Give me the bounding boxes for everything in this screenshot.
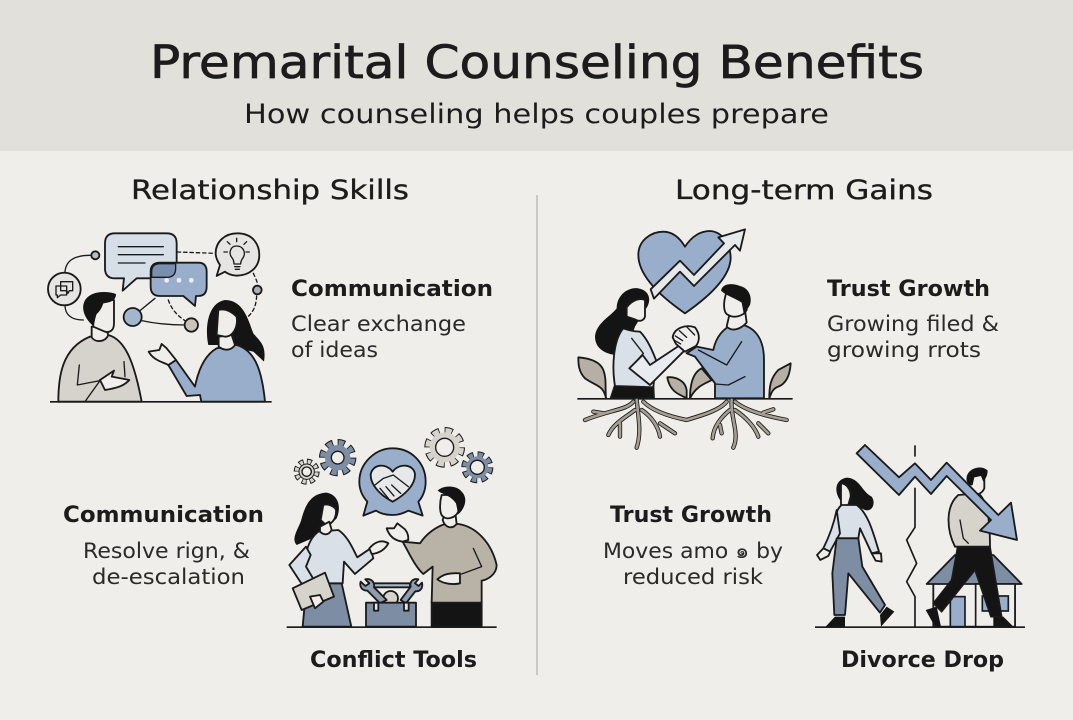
subtitle: How counseling helps couples prepare <box>244 99 829 130</box>
text: trust growth top <box>827 277 999 362</box>
text: communication: Clear exchange <box>291 312 466 336</box>
text: trust growth lower <box>603 503 783 589</box>
illustration: trust growth couple with roots <box>577 229 793 448</box>
gears <box>297 431 490 482</box>
text: communication lower: Resolve rign, & <box>83 539 250 563</box>
illustration: divorce drop <box>815 445 1025 628</box>
text: trust growth lower: Trust Growth <box>610 503 772 528</box>
woman walking <box>817 478 894 627</box>
heading: Long-term Gains: Long-term Gains <box>675 175 933 206</box>
text: communication <box>291 277 493 362</box>
text: trust growth top: Growing filed & <box>827 312 999 336</box>
illustration: conflict tools couple <box>287 431 497 628</box>
text: communication: of ideas <box>291 338 378 362</box>
text: communication lower: Communication <box>63 503 264 528</box>
text: communication lower: de-escalation <box>92 565 245 589</box>
text: trust growth lower: Moves amo ๑ by <box>603 539 783 563</box>
label: divorce drop: Divorce Drop <box>841 648 1004 673</box>
roots <box>585 400 787 448</box>
text: trust growth top: growing rrots <box>827 338 981 362</box>
toolbox <box>360 579 422 627</box>
text: trust growth top: Trust Growth <box>827 277 990 302</box>
label: conflict tools: Conflict Tools <box>310 648 477 673</box>
heading: Relationship Skills: Relationship Skills <box>131 175 409 206</box>
title: Premarital Counseling Benefits <box>150 36 924 89</box>
illustration: communication couple <box>48 233 272 403</box>
text: communication: Communication <box>291 277 493 302</box>
text: trust growth lower: reduced risk <box>623 565 764 589</box>
speech bubble with handshake heart <box>359 448 426 516</box>
header band <box>0 0 1073 151</box>
house <box>927 555 1022 627</box>
man carrying <box>926 468 1013 627</box>
text: communication lower <box>63 503 264 589</box>
down arrow <box>857 445 1017 540</box>
